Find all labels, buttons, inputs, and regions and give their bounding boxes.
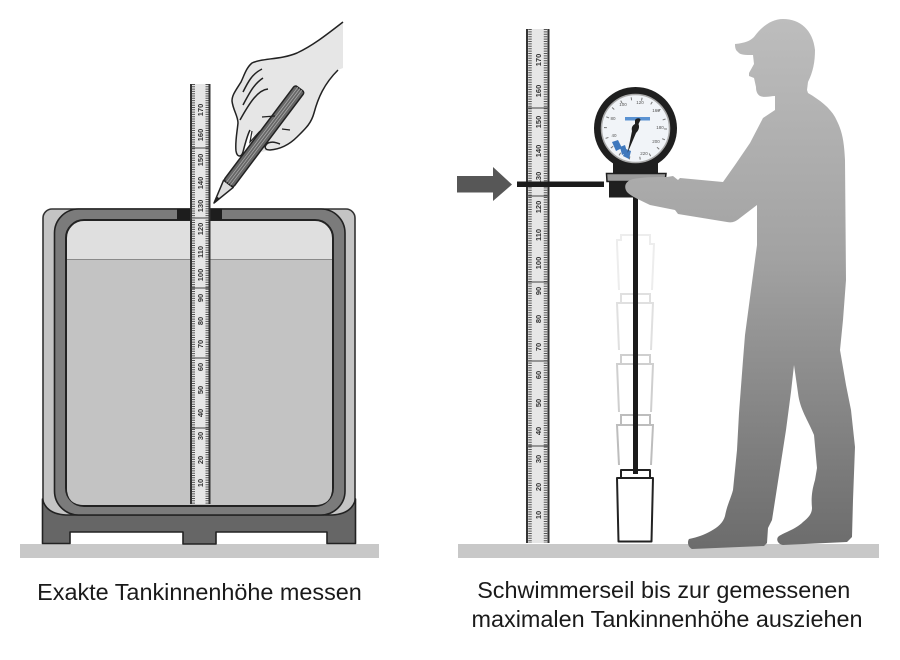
- ruler right: 90: [534, 287, 543, 295]
- pressure gauge: [594, 87, 677, 198]
- ruler left: 130: [196, 200, 205, 212]
- gauge scale numbers: 220: [640, 151, 648, 156]
- float: [617, 470, 653, 542]
- gauge brand: [625, 117, 650, 120]
- ghost float 2: [617, 294, 653, 350]
- tank interior: [66, 220, 333, 506]
- tank outer shell: [43, 209, 355, 519]
- ruler right: [526, 29, 549, 543]
- panel: tank measurement: [20, 22, 379, 605]
- ruler left: 140: [196, 177, 205, 189]
- ruler right: 20: [534, 483, 543, 491]
- gauge scale numbers: 100: [619, 102, 627, 107]
- ruler right: 160: [534, 85, 543, 97]
- ruler right: 170: [534, 54, 543, 66]
- tank opening: [177, 208, 222, 220]
- liquid level line: [67, 258, 332, 260]
- gauge scale numbers: 120: [636, 100, 644, 105]
- icon: hand holding pencil: [209, 22, 343, 207]
- ruler left: 20: [196, 456, 205, 464]
- ruler left: 30: [196, 432, 205, 440]
- ruler left: 80: [196, 317, 205, 325]
- ruler left: 100: [196, 269, 205, 281]
- gauge mount block: [609, 182, 639, 198]
- panel: float cable extension: [457, 19, 879, 632]
- arrow: [457, 167, 512, 201]
- floor left: [20, 544, 379, 558]
- ruler right: 120: [534, 201, 543, 213]
- ruler left: 70: [196, 340, 205, 348]
- gauge plate: [606, 174, 666, 182]
- ruler left: [190, 84, 210, 504]
- ghost float 3: [617, 355, 653, 412]
- ruler right: 70: [534, 343, 543, 351]
- person silhouette: [625, 19, 855, 549]
- ruler right: 30: [534, 455, 543, 463]
- ruler right: 140: [534, 145, 543, 157]
- tank on pallet: [42, 208, 356, 544]
- ruler right: 110: [534, 229, 543, 241]
- ruler left: 110: [196, 246, 205, 258]
- ghost float 4: [617, 415, 653, 465]
- ruler left: 120: [196, 223, 205, 235]
- ruler right: 130: [534, 172, 543, 184]
- marker line: [517, 182, 604, 187]
- caption right: Schwimmerseil bis zur gemessenen: [477, 577, 850, 603]
- ruler left: 160: [196, 129, 205, 141]
- caption right: maximalen Tankinnenhöhe ausziehen: [472, 606, 862, 632]
- ghost float 1: [617, 235, 654, 290]
- gauge blue zone: [612, 140, 631, 159]
- ruler left: 90: [196, 294, 205, 302]
- hand: [232, 22, 343, 156]
- gauge base: [613, 163, 658, 175]
- gauge scale numbers: 40: [611, 133, 617, 138]
- gauge face: [602, 94, 670, 162]
- ruler left: 170: [196, 104, 205, 116]
- gauge bezel: [594, 87, 677, 170]
- ruler right: 40: [534, 427, 543, 435]
- pencil: [209, 85, 305, 207]
- fingertip details: [250, 116, 290, 142]
- gauge scale numbers: 200: [652, 139, 660, 144]
- gauge scale numbers: 80: [610, 116, 616, 121]
- gauge scale numbers: 160: [652, 108, 660, 113]
- gauge needle: [628, 118, 640, 153]
- gauge ticks: [606, 98, 666, 158]
- ruler right: 100: [534, 257, 543, 269]
- ruler right: 10: [534, 511, 543, 519]
- ruler left: 60: [196, 363, 205, 371]
- gauge scale numbers: 180: [656, 125, 664, 130]
- floor right: [458, 544, 879, 558]
- ruler left: 40: [196, 409, 205, 417]
- pallet: [42, 499, 356, 544]
- ruler left: 150: [196, 154, 205, 166]
- ruler right: 150: [534, 116, 543, 128]
- gauge scale numbers: [610, 100, 664, 156]
- ruler left: 10: [196, 479, 205, 487]
- float cable: [633, 195, 638, 474]
- ruler right: 50: [534, 399, 543, 407]
- ruler left: 50: [196, 386, 205, 394]
- ruler right: 80: [534, 315, 543, 323]
- tank frame: [54, 209, 345, 515]
- ruler right: 60: [534, 371, 543, 379]
- caption left: Exakte Tankinnenhöhe messen: [37, 579, 362, 605]
- liquid: [67, 260, 332, 505]
